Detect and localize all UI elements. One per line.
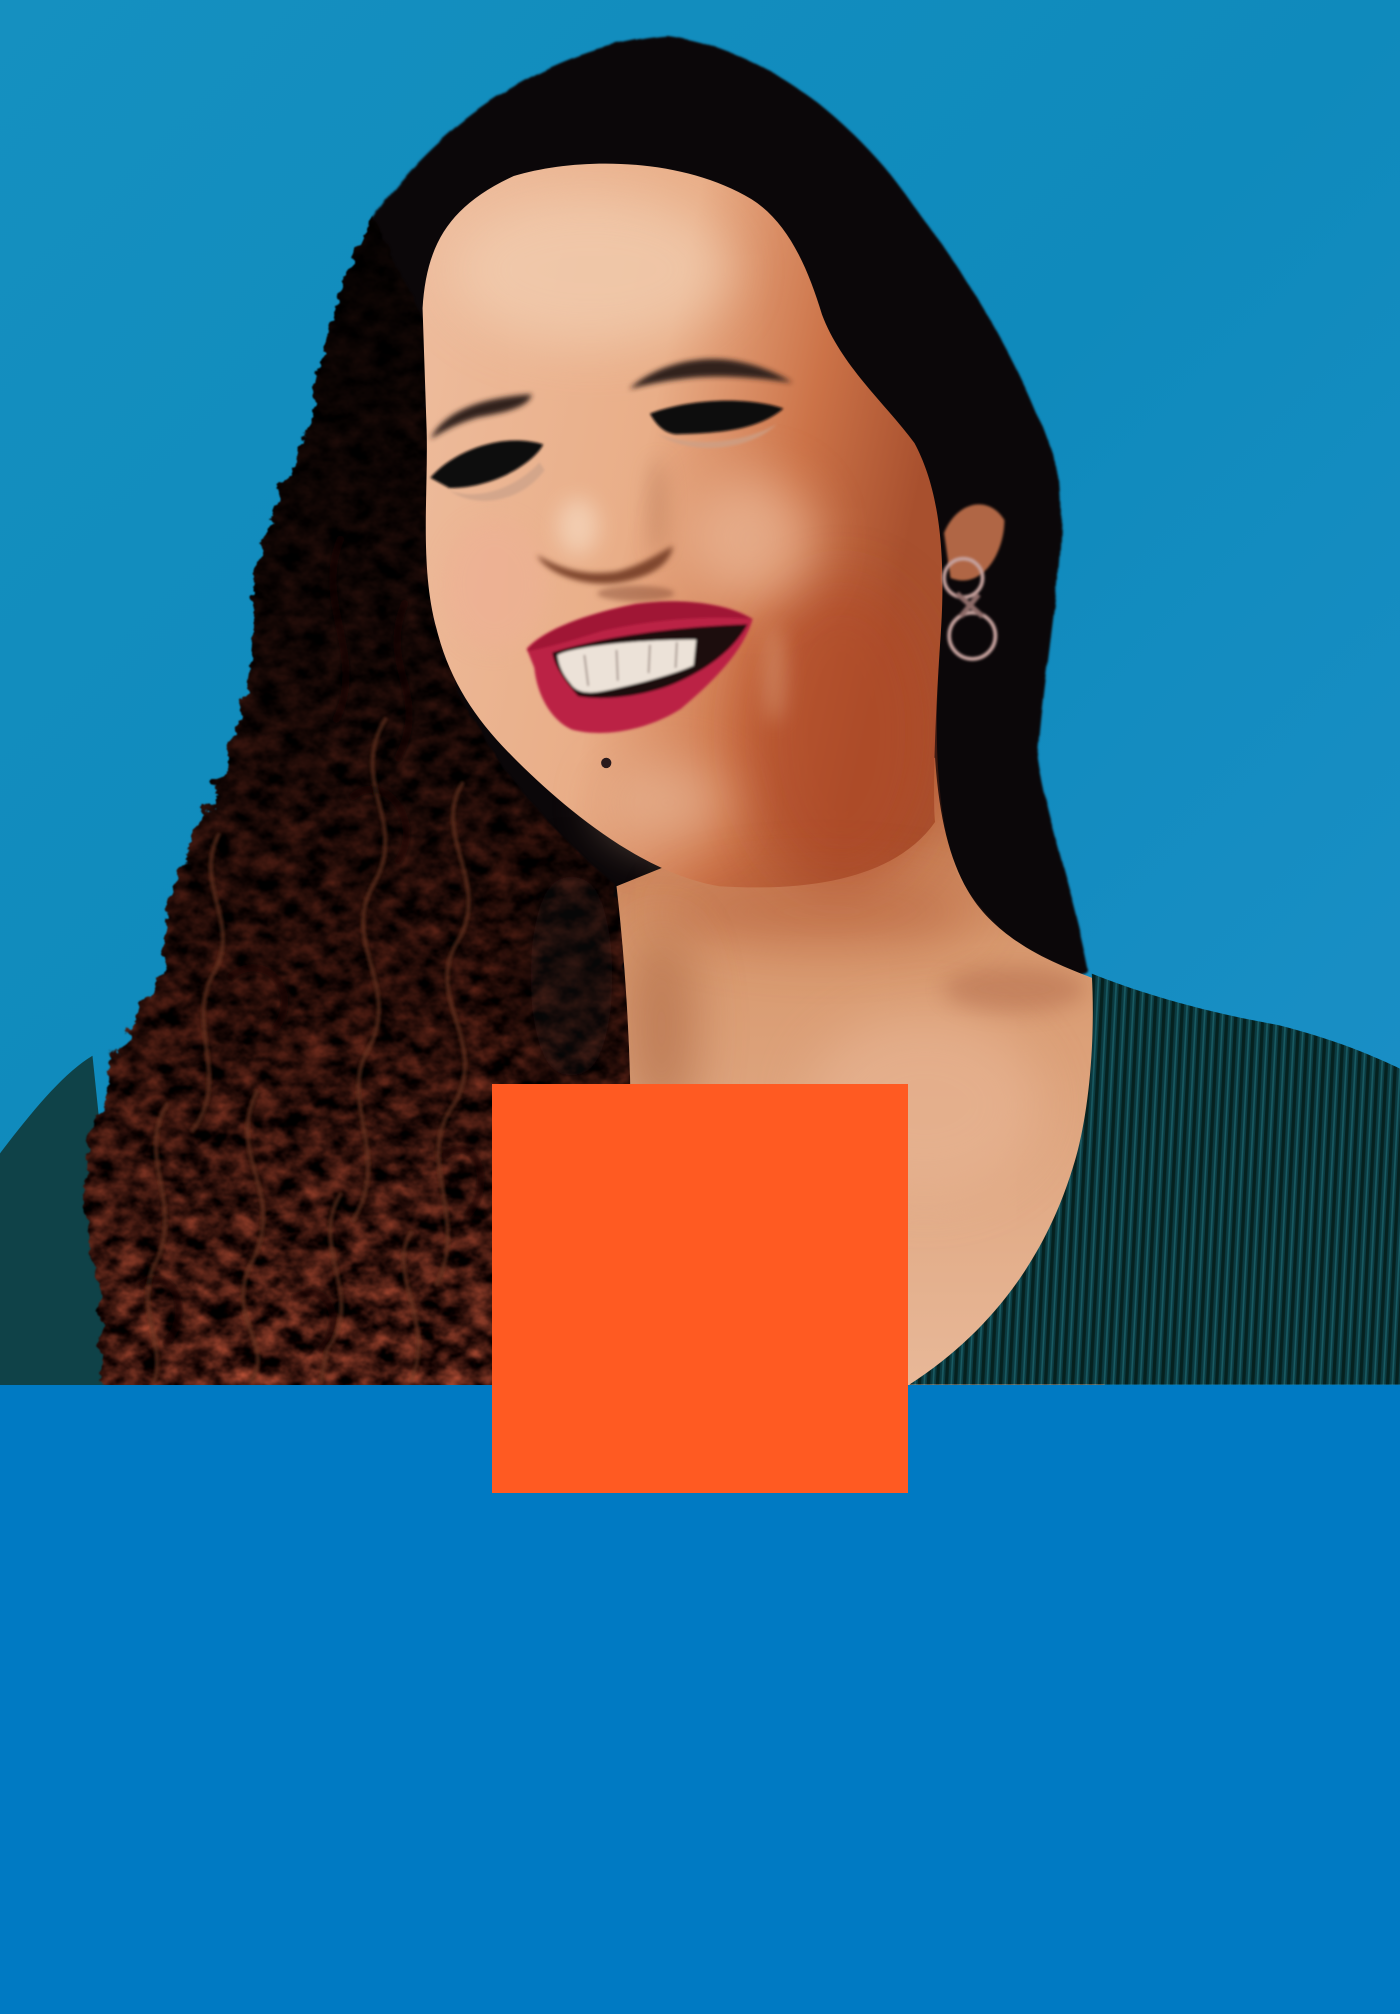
smile crease — [764, 626, 785, 723]
orange square — [492, 1084, 908, 1493]
facial and neck shading — [443, 193, 1085, 1194]
infographic canvas — [0, 0, 1400, 1493]
shirt, right pleated panel — [909, 974, 1400, 1385]
earring — [944, 559, 995, 659]
curl strands — [141, 539, 481, 1381]
blue lower panel — [0, 1385, 1400, 2014]
shadow in hair beside neck — [530, 867, 613, 1085]
left eyebrow — [430, 394, 532, 439]
shirt, left shoulder — [0, 1056, 106, 1385]
ear — [944, 504, 1004, 581]
right eyebrow — [629, 359, 792, 389]
dark hair mass, top and right — [321, 36, 1089, 1028]
face — [423, 164, 942, 887]
right eye — [650, 401, 783, 448]
nose — [537, 459, 674, 601]
mole — [601, 758, 611, 768]
smile with red lips — [527, 601, 753, 733]
long curly hair, left side — [84, 216, 639, 1439]
portrait photo — [0, 0, 1400, 1439]
left eye — [430, 440, 545, 501]
blue studio backdrop — [0, 0, 1400, 1387]
neck and chest skin — [617, 758, 1105, 1387]
